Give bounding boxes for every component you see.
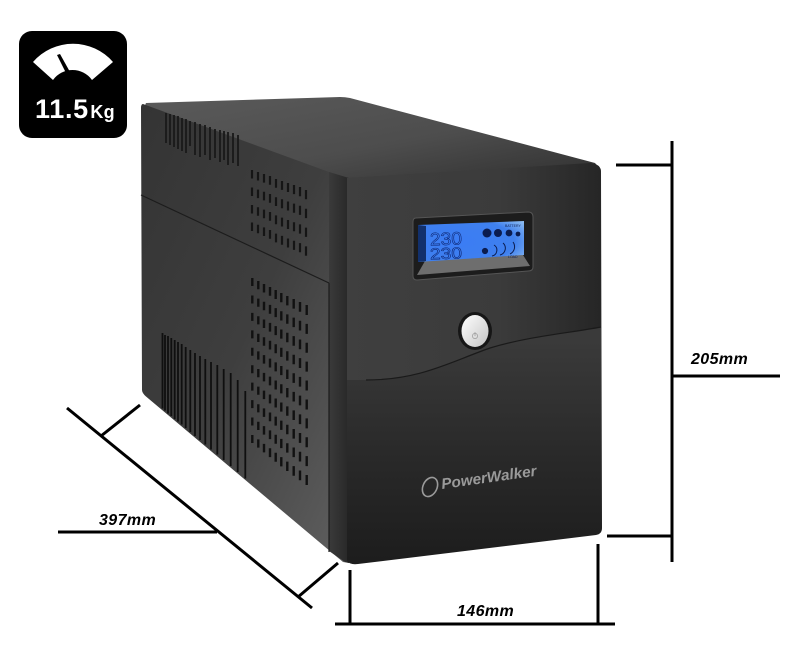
lower vent grid — [252, 278, 307, 485]
LCD load label: LOAD — [508, 255, 518, 259]
LCD battery indicators — [482, 228, 520, 238]
weight badge — [19, 31, 127, 138]
weight value: 11.5Kg — [35, 94, 115, 124]
LCD screen — [418, 221, 524, 264]
bottom vent slots — [162, 333, 245, 478]
depth label: 397mm — [99, 512, 156, 529]
depth dimension — [58, 405, 338, 608]
top vent slots — [166, 113, 238, 166]
LCD load indicators — [482, 242, 515, 256]
LCD lower reading: 230 — [430, 245, 462, 264]
LCD bezel — [413, 212, 533, 280]
upper vent grid — [252, 170, 306, 256]
width label: 146mm — [457, 603, 514, 620]
device side face — [141, 104, 349, 563]
power button — [458, 312, 492, 350]
PowerWalker logo: PowerWalker — [440, 463, 539, 493]
front upper panel — [347, 163, 601, 380]
device front-left strip — [329, 172, 349, 563]
PowerWalker logo — [419, 463, 539, 499]
icon: scale gauge — [33, 44, 113, 80]
height label: 205mm — [690, 351, 748, 368]
LCD upper reading: 230 — [430, 228, 462, 250]
front panel swoosh — [366, 327, 601, 380]
device front face — [347, 163, 602, 564]
LCD lower bezel highlight — [417, 255, 530, 275]
LCD battery label: BATTERY — [505, 224, 521, 228]
device top face — [143, 97, 601, 182]
panel seam on side — [141, 195, 329, 552]
UPS device — [141, 97, 602, 564]
icon: gauge needle — [57, 54, 70, 73]
